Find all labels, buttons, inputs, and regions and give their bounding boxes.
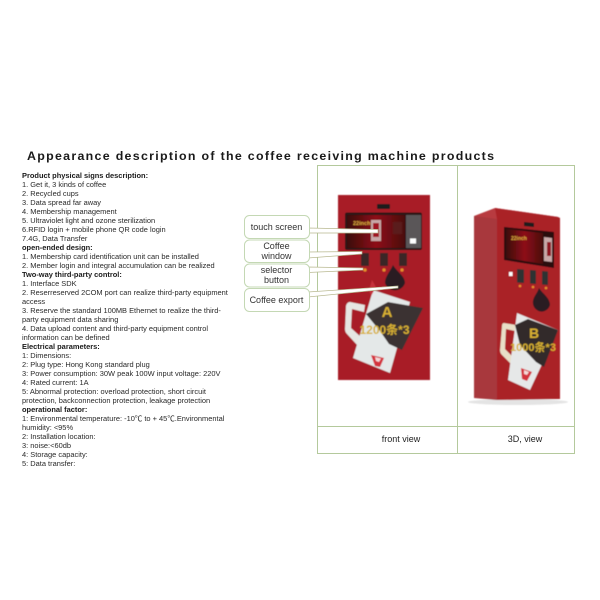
caption: 3D view: 3D, view [508,434,543,444]
text block: product specifications: 4: Storage capacity: [22,450,88,459]
text block: product specifications: 2: Plug type: Hong Kong standard plug [22,360,150,369]
machine: 3D view: 22inch [511,236,527,242]
text block: product specifications: 5: Data transfer: [22,459,75,468]
machine: 3D view: B [529,325,539,341]
callout: selector button [244,264,363,287]
machine: 3D view: 1000条*3 [510,340,556,354]
text block: product specifications: 1: Environmental temperature: -10℃ to + 45℃.Environmental [22,414,225,423]
callout: coffee window: window [260,251,292,261]
text block: product specifications: 3. Reserve the standard 100MB Ethernet to realize the third- [22,306,221,315]
text block: product specifications: 4. Membership management [22,207,118,216]
text block: product specifications: 3: Power consumption: 30W peak 100W input voltage: 220V [22,369,220,378]
text block: product specifications: 1. Interface SDK [22,279,77,288]
text block: product specifications: protection, backconnection protection, leakage protection [22,396,210,405]
callout: touch screen [244,216,378,238]
text block: product specifications: Two-way third-party control: [22,270,122,279]
text block: product specifications: open-ended design: [22,243,93,252]
text block: product specifications: operational factor: [22,405,87,414]
text block: product specifications: 6.RFID login + mobile phone QR code login [22,225,166,234]
text block: product specifications: access [22,297,45,306]
machine: 3D view [468,208,568,405]
text block: product specifications [22,171,229,468]
machine: front view: 22inch [353,221,371,227]
text block: product specifications: 1. Membership card identification unit can be installed [22,252,199,261]
callout: coffee window: Coffee [263,241,290,251]
text block: product specifications: 2: Installation location: [22,432,96,441]
text block: product specifications: 1. Get it, 3 kinds of coffee [22,180,106,189]
text block: product specifications: 2. Reserreserved 2COM port can realize third-party equipment [22,288,229,297]
text block: product specifications: 5: Abnormal protection: overload protection, short circuit [22,387,207,396]
text block: product specifications: 5. Ultraviolet light and ozone sterilization [22,216,155,225]
text block: product specifications: 4. Data upload content and third-party equipment control [22,324,208,333]
machine: front view: 1200条*3 [359,322,410,337]
text block: product specifications: Electrical parameters: [22,342,100,351]
callout: touch screen: touch screen [251,222,302,232]
text block: product specifications: 3. Data spread far away [22,198,101,207]
text block: product specifications: information can be defined [22,333,110,342]
caption: front view: front view [382,434,421,444]
callout: coffee export [244,286,398,312]
machine: front view [338,195,430,380]
callout: selector button: selector [261,265,292,275]
text block: product specifications: party equipment data sharing [22,315,118,324]
text block: product specifications: 1: Dimensions: [22,351,71,360]
title: Appearance description of the coffee receiving machine products [27,149,494,163]
text block: product specifications: 3: noise:<60db [22,441,71,450]
text block: product specifications: humidity: <95% [22,423,73,432]
callout: coffee window [244,240,362,262]
machine: front view: A [382,304,393,321]
callout: selector button: button [264,275,289,285]
text block: product specifications: 2. Recycled cups [22,189,79,198]
panel: product views frame [318,166,574,454]
text block: product specifications: Product physical signs description: [22,171,148,180]
text block: product specifications: 7.4G, Data Transfer [22,234,88,243]
text block: product specifications: 2. Member login and integral accumulation can be realized [22,261,215,270]
text block: product specifications: 4: Rated current: 1A [22,378,89,387]
callout: coffee export: Coffee export [250,295,304,305]
